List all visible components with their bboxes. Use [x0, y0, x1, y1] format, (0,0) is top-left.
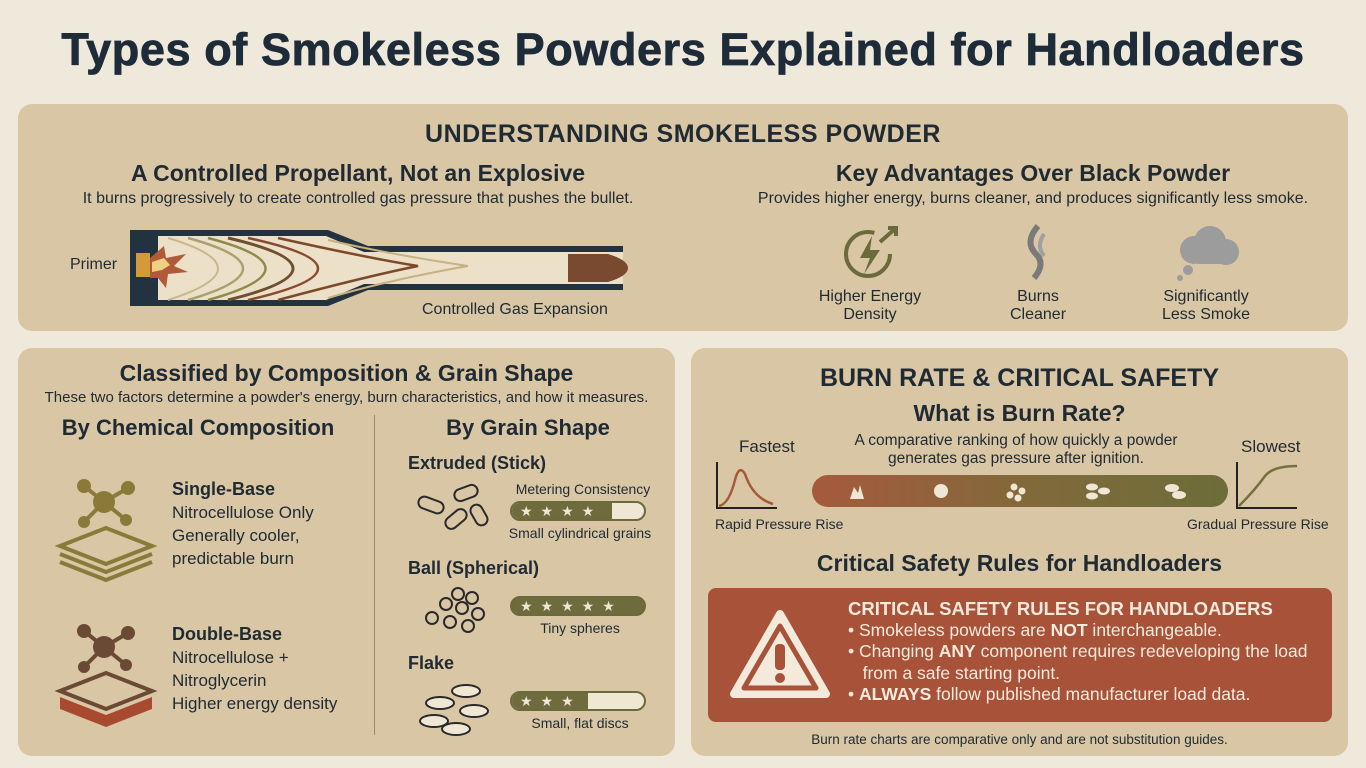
icon: cloud: [1177, 226, 1239, 281]
safety rules text: • Changing ANY component requires redeveloping the load: [848, 641, 1307, 661]
rating 3 stars: [510, 691, 646, 711]
description: A comparative ranking of how quickly a powder generates gas pressure after ignition.: [854, 432, 1178, 467]
label: less smoke: Significantly: [1163, 288, 1249, 305]
intro text: These two factors determine a powder's energy, burn characteristics, and how it measures.: [45, 389, 648, 406]
label: higher energy density: [819, 288, 922, 323]
text left: It burns progressively to create controlled gas pressure that pushes the bullet.: [83, 190, 633, 207]
icon: discs: [419, 684, 489, 736]
title: Types of Smokeless Powders Explained for Handloaders: [61, 24, 1305, 75]
text double-base: Nitroglycerin: [172, 671, 266, 690]
subheading right: Key Advantages Over Black Powder: [836, 160, 1230, 186]
safety rules text: • Smokeless powders are NOT interchangeable.: [848, 620, 1222, 640]
text double-base: Double-Base: [172, 624, 282, 644]
heading: BURN RATE & CRITICAL SAFETY: [820, 364, 1219, 392]
label gradual: Gradual Pressure Rise: [1187, 516, 1329, 532]
chart slow: [1236, 462, 1297, 509]
label: burns cleaner: Burns: [1017, 288, 1059, 305]
icon: warning triangle: [730, 610, 830, 698]
rating 5 stars: ★★★★★: [520, 598, 623, 614]
icon: energy: [844, 226, 898, 278]
safety rules text: • ALWAYS follow published manufacturer load data.: [848, 684, 1250, 704]
flake: [408, 653, 646, 736]
label: primer: Primer: [70, 256, 117, 273]
subheading: What is Burn Rate?: [913, 400, 1126, 426]
text single-base: predictable burn: [172, 549, 294, 568]
text single-base: Single-Base: [172, 479, 275, 499]
rating 4 stars: [510, 501, 646, 521]
label: burns cleaner: Cleaner: [1010, 306, 1066, 323]
label: less smoke: Less Smoke: [1162, 306, 1250, 323]
column heading grain shape: By Grain Shape: [446, 415, 610, 440]
ball: [408, 558, 646, 636]
chart fast: [716, 462, 777, 509]
safety rules text: CRITICAL SAFETY RULES FOR HANDLOADERS: [848, 598, 1273, 619]
caption: Tiny spheres: [540, 620, 620, 636]
gradient bar: [812, 475, 1228, 507]
label flake: Flake: [408, 653, 454, 673]
label: controlled gas expansion: Controlled Gas Expansion: [422, 301, 608, 318]
icon: double-base molecule: [54, 624, 158, 727]
double-base: [54, 624, 338, 727]
label ball: Ball (Spherical): [408, 558, 539, 578]
label fastest: Fastest: [739, 437, 795, 456]
panel: understanding smokeless powder: [18, 104, 1348, 331]
cartridge diagram: [130, 230, 628, 306]
icon: single-base molecule: [54, 479, 158, 582]
rating 3 stars: ★★★: [520, 693, 582, 709]
label extruded: Extruded (Stick): [408, 453, 546, 473]
safety callout box: [708, 588, 1332, 722]
single-base: [54, 479, 314, 582]
panel: classification: [18, 348, 675, 756]
label slowest: Slowest: [1241, 437, 1301, 456]
caption: Small cylindrical grains: [509, 525, 651, 541]
text double-base: Higher energy density: [172, 694, 337, 713]
metering label: Metering Consistency: [516, 481, 650, 497]
icon: burns cleaner: [1028, 224, 1046, 280]
heading: UNDERSTANDING SMOKELESS POWDER: [425, 120, 941, 148]
icon: spheres: [425, 587, 485, 633]
safety heading: Critical Safety Rules for Handloaders: [817, 550, 1222, 576]
rating 4 stars: ★★★★: [520, 503, 602, 519]
text single-base: Nitrocellulose Only: [172, 503, 314, 522]
text single-base: [172, 479, 314, 568]
panel: burn rate & safety: [691, 348, 1348, 756]
heading: Classified by Composition & Grain Shape: [120, 360, 573, 386]
text double-base: [172, 624, 338, 713]
text single-base: Generally cooler,: [172, 526, 300, 545]
label: burns cleaner: [1010, 288, 1066, 323]
text right: Provides higher energy, burns cleaner, and produces significantly less smoke.: [758, 190, 1308, 207]
safety rules text: from a safe starting point.: [863, 662, 1060, 682]
extruded: [408, 453, 651, 541]
column heading composition: By Chemical Composition: [62, 415, 334, 440]
label: higher energy density: Higher Energy: [819, 288, 921, 305]
safety rules text: [848, 598, 1307, 704]
text double-base: Nitrocellulose +: [172, 648, 289, 667]
caption: Small, flat discs: [531, 715, 629, 731]
footnote: Burn rate charts are comparative only and are not substitution guides.: [811, 732, 1228, 747]
icon: sticks: [417, 484, 488, 530]
subheading left: A Controlled Propellant, Not an Explosive: [131, 160, 585, 186]
label rapid: Rapid Pressure Rise: [715, 516, 843, 532]
label: less smoke: [1162, 288, 1250, 323]
rating 5 stars: [510, 596, 646, 616]
label: higher energy density: Density: [843, 306, 897, 323]
icons on bar: [850, 484, 1186, 502]
